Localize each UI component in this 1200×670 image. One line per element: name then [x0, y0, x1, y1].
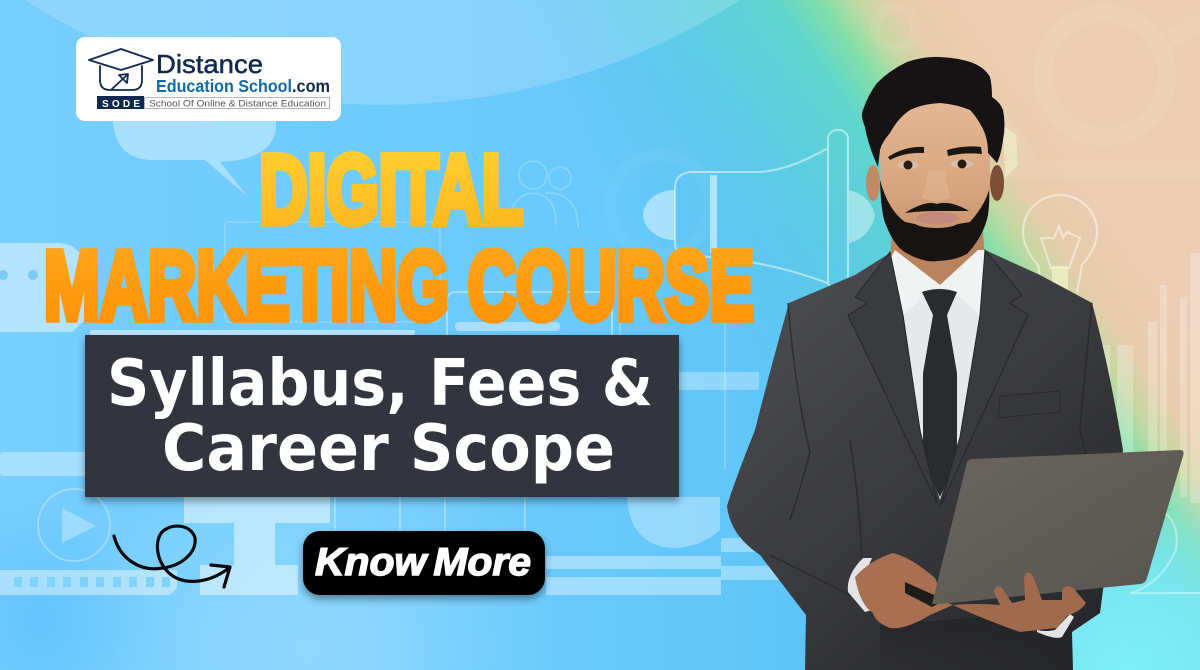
logo text: Education School: Education School: [156, 76, 292, 96]
subtitle panel: [85, 335, 679, 497]
jacket lapels: [848, 250, 1028, 507]
title line: MARKETING COURSE: MARKETING COURSE: [44, 231, 754, 340]
subtitle line 2: Career Scope: [162, 412, 615, 486]
suit shading: [770, 303, 1095, 600]
hair: [862, 57, 1004, 167]
nose shading: [921, 170, 951, 202]
neck: [890, 215, 985, 290]
button: Know More: [303, 531, 545, 595]
necktie: [922, 289, 957, 497]
icon: gear: [610, 155, 710, 255]
logo text: Distance: Distance: [156, 49, 263, 79]
subtitle line 1: Syllabus, Fees &: [107, 347, 653, 421]
icon: film strip top: [0, 452, 88, 476]
eyes: [897, 161, 919, 169]
lips: [916, 212, 958, 224]
icon: bar chart: [1098, 253, 1200, 503]
icon: T-shaped block: [184, 497, 330, 595]
head: [862, 57, 1004, 261]
moustache: [905, 203, 969, 213]
beard: [880, 180, 989, 261]
icon: film strip bottom: [0, 570, 177, 595]
logo card: [76, 37, 341, 121]
jacket pocket: [998, 391, 1060, 418]
icon: play button: [38, 489, 110, 561]
logo: [76, 37, 341, 121]
icon: chart box: [90, 222, 725, 470]
icon: lower bars behind person: [721, 538, 861, 580]
icon: hexagon behind head: [1003, 125, 1018, 178]
icon: pie chart: [627, 497, 720, 548]
eyebrows: [888, 146, 982, 160]
logo badge: SODE: [97, 96, 144, 109]
person: [727, 57, 1184, 670]
icon: light bulb: [1023, 195, 1097, 294]
left hand and cuff: [848, 553, 953, 628]
logo text: dot com: .com: [292, 76, 330, 96]
icon: left message bubble: [0, 243, 85, 332]
face: [879, 100, 990, 261]
suit jacket: [727, 250, 1123, 670]
icon: chat bubble: [113, 120, 276, 197]
button label: Know More: [315, 541, 531, 584]
right hand and cuff: [953, 572, 1086, 638]
icon: audience: [510, 161, 578, 228]
background: large circle: [25, 0, 740, 105]
ears: [866, 165, 880, 201]
icon: graduation cap: [89, 49, 153, 90]
shirt collar: [891, 250, 985, 315]
icon: megaphone: [643, 130, 875, 290]
laptop: [905, 450, 1184, 607]
icon: gears top right: [875, 8, 1200, 170]
title line: DIGITAL: DIGITAL: [259, 135, 523, 244]
icon: vertical lines: [335, 497, 525, 530]
arrow: curly swirl: [114, 526, 230, 587]
logo tagline box: [144, 98, 330, 108]
logo tagline: School Of Online & Distance Education: [149, 98, 326, 110]
icon: tablet bottom right: [1125, 510, 1200, 593]
icon: side bar: [679, 372, 759, 390]
shirt: [895, 250, 980, 500]
lower torso shadow: [880, 610, 1072, 670]
icon: bottom bars: [546, 556, 721, 595]
logo badge text: SODE: [102, 99, 140, 110]
